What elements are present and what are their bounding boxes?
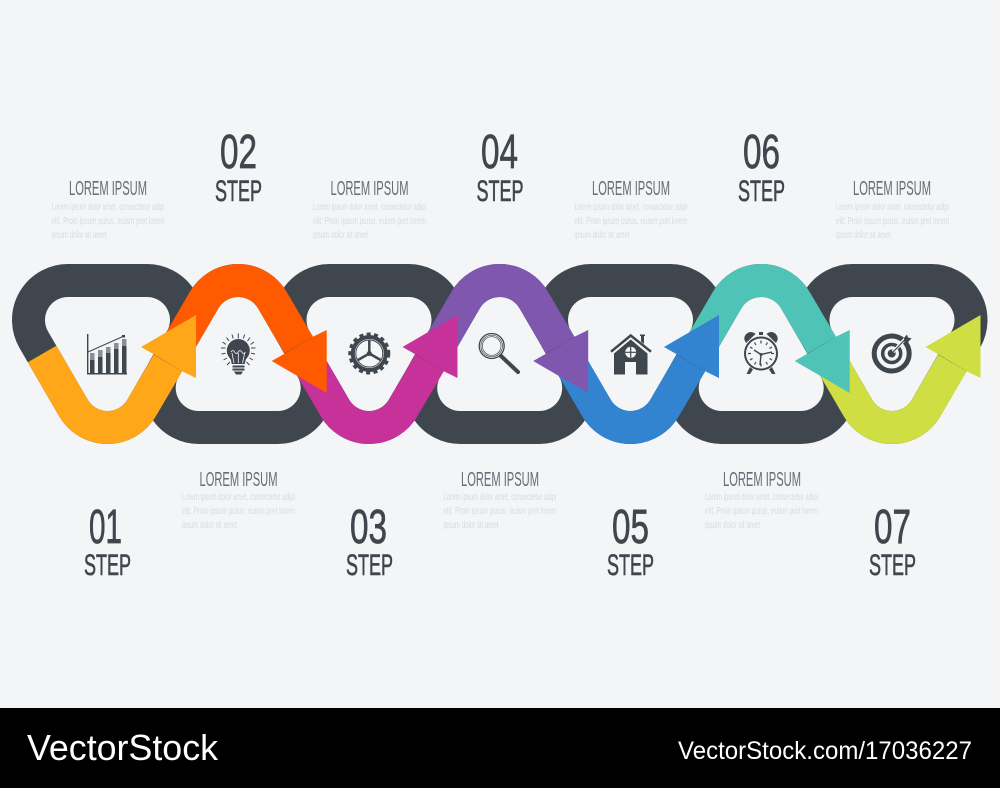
text block: step 07: [836, 178, 949, 241]
text block: step 03: Lorem ipsum dolor amet, consectetur adipi: [313, 202, 426, 213]
step 07 label: [869, 501, 916, 582]
text block: step 02: LOREM IPSUM: [200, 469, 278, 491]
step 03 label: STEP: [346, 549, 393, 582]
icon: light bulb: [221, 334, 256, 374]
step 04 label: STEP: [476, 175, 524, 208]
arrow 06: teal: [696, 281, 850, 393]
text block: step 02: ipsum dolor sit amet: [182, 520, 237, 531]
text block: step 04: LOREM IPSUM: [461, 469, 539, 491]
text block: step 06: LOREM IPSUM: [723, 469, 801, 491]
step 05 label: 05: [612, 501, 649, 554]
text block: step 02: elit. Proin ipsum purus, euism pret lorem: [182, 506, 295, 517]
watermark footer bar: VectorStock: [27, 727, 219, 768]
text block: step 04: elit. Proin ipsum purus, euism pret lorem: [444, 506, 556, 517]
step 03 label: [346, 501, 393, 582]
arrow 07: lime: [827, 315, 980, 427]
text block: step 06: Lorem ipsum dolor amet, consectetur adipi: [705, 492, 818, 503]
step 04 label: 04: [481, 126, 518, 179]
text block: step 01: [52, 178, 164, 241]
step 02 label: STEP: [215, 175, 262, 208]
text block: step 03: elit. Proin ipsum purus, euism pret lorem: [313, 216, 426, 227]
arrow 02: orange: [173, 281, 327, 393]
icon: magnifying glass: [479, 334, 518, 372]
step 02 label: 02: [220, 126, 257, 179]
text block: step 05: ipsum dolor sit amet: [574, 230, 630, 241]
icon: target: [874, 334, 912, 371]
step 01 label: [84, 501, 131, 582]
text block: step 02: Lorem ipsum dolor amet, consectetur adipi: [182, 492, 295, 503]
step 07 label: STEP: [869, 549, 916, 582]
icon: bar chart: [87, 334, 127, 374]
text block: step 04: Lorem ipsum dolor amet, consectetur adipi: [444, 492, 556, 503]
text block: step 01: ipsum dolor sit amet: [52, 230, 107, 241]
arrow 05: blue: [565, 315, 719, 427]
step 02 label: [215, 126, 262, 208]
text block: step 05: [574, 178, 688, 241]
chain of dark rounded triangles: [29, 280, 971, 428]
text block: step 03: LOREM IPSUM: [330, 178, 408, 200]
text block: step 01: LOREM IPSUM: [69, 178, 147, 200]
text block: step 07: ipsum dolor sit amet: [836, 230, 891, 241]
arrow 03: magenta: [304, 315, 458, 427]
text block: step 04: ipsum dolor sit amet: [444, 520, 499, 531]
text block: step 01: elit. Proin ipsum purus, euism pret lorem: [52, 216, 164, 227]
text block: step 07: LOREM IPSUM: [853, 178, 931, 200]
icon: alarm clock: [744, 332, 778, 374]
icon: gear: [350, 334, 388, 372]
text block: step 06: elit. Proin ipsum purus, euism pret lorem: [705, 506, 818, 517]
step 06 label: 06: [743, 126, 780, 179]
text block: step 02: [182, 469, 295, 531]
text block: step 06: ipsum dolor sit amet: [705, 520, 760, 531]
arrow 04: purple: [434, 281, 588, 393]
arrow 01: yellow: [42, 315, 196, 427]
text block: step 06: [705, 469, 818, 531]
step 05 label: STEP: [607, 549, 654, 582]
text block: step 01: Lorem ipsum dolor amet, consectetur adipi: [52, 202, 164, 213]
watermark footer bar: [0, 708, 1000, 788]
text block: step 04: [444, 469, 556, 531]
step 04 label: [476, 126, 524, 208]
text block: step 05: Lorem ipsum dolor amet, consectetur adipi: [574, 202, 688, 213]
step 06 label: [738, 126, 785, 208]
step 01 label: 01: [89, 501, 122, 554]
text block: step 03: [313, 178, 426, 241]
step 05 label: [607, 501, 654, 582]
icon: house: [611, 334, 651, 374]
text block: step 03: ipsum dolor sit amet: [313, 230, 368, 241]
step 06 label: STEP: [738, 175, 785, 208]
step 03 label: 03: [350, 501, 387, 554]
step 07 label: 07: [874, 501, 911, 554]
text block: step 05: LOREM IPSUM: [592, 178, 670, 200]
step 01 label: STEP: [84, 549, 131, 582]
text block: step 05: elit. Proin ipsum purus, euism pret lorem: [574, 216, 688, 227]
watermark footer bar: VectorStock.com/17036227: [678, 737, 972, 765]
